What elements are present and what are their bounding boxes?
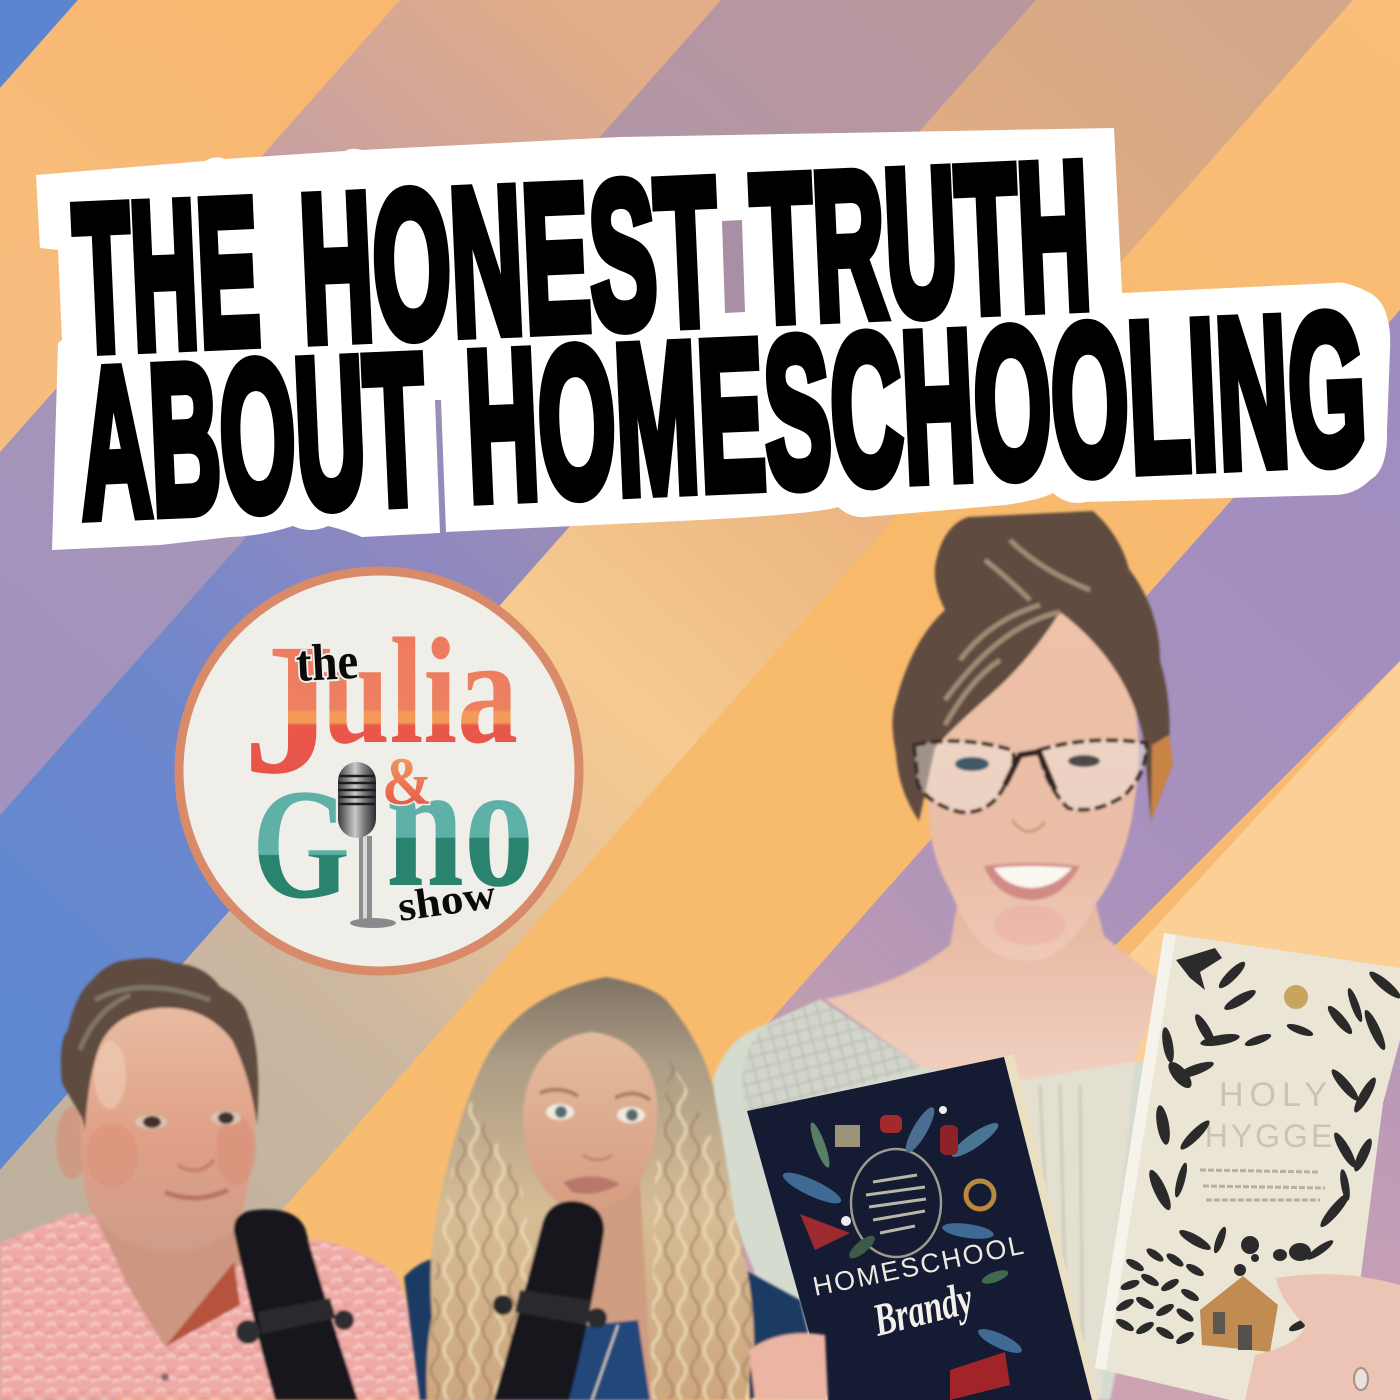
background hole between words [722,220,745,313]
logo letters: ulia: ulia [322,607,518,775]
denim top [550,1320,650,1400]
bird [1176,948,1222,990]
title line 1 [70,120,1095,396]
brows [540,1090,650,1100]
eyes [135,1115,167,1129]
face [80,1003,255,1252]
sweater knit shoulder [742,999,923,1110]
cover circle emblem [851,1149,941,1257]
title line 1: THE [70,156,264,396]
smile [984,863,1080,900]
navy shirt [404,1257,470,1400]
title sticker [36,120,1390,562]
blouse front [1013,1062,1135,1400]
person: woman holding books [713,511,1180,1400]
title line 2 [75,269,1371,562]
house illustration [1200,1276,1278,1352]
neck and chest [825,880,1165,1080]
book title: HOLY [1219,1076,1333,1114]
neck [90,1205,244,1347]
shirt [0,1213,432,1400]
foliage wreath [1114,959,1400,1346]
nose [583,1155,612,1160]
mouth [563,1176,620,1194]
podcast microphone [234,1209,358,1400]
hair curl texture [427,1060,754,1400]
face [523,1032,657,1212]
cover title: HOMESCHOOL [810,1229,1030,1302]
hair and bun [892,511,1173,821]
logo letter: J: J [243,604,335,813]
open collar [165,1262,240,1347]
glasses [914,740,1146,812]
hand holding book [1245,1274,1400,1400]
title line 2: ABOUT [75,310,430,562]
logo word: the: the [295,633,360,693]
necklace [592,1325,618,1400]
glasses bridge [1005,752,1055,790]
podcast microphone [493,1201,607,1400]
white sticker backing [36,128,1390,550]
button [1284,985,1308,1009]
logo ampersand: & [382,743,432,819]
raised hand [749,1333,828,1400]
person: man in pink shirt [0,958,432,1400]
ring [1354,1368,1368,1390]
neck [560,1180,652,1400]
title line 1: HONEST [296,136,722,386]
cover decorations [780,1104,1025,1400]
book: white Holy Hygge [1095,933,1400,1400]
hair back [427,977,754,1400]
mouth [165,1190,228,1198]
logo word: G: G [252,757,350,932]
shirt buttons [161,1373,169,1381]
logo word: show: show [395,872,499,931]
book: dark Homeschool [747,1054,1098,1400]
book subtitle: HYGGE [1205,1118,1335,1154]
logo word: no: no [386,725,534,924]
nose [1012,820,1045,832]
hair [61,958,258,1130]
ear [56,1107,88,1179]
eyes [546,1104,574,1120]
face [928,609,1139,961]
logo microphone [338,762,396,928]
cover script name: Brandy [867,1272,978,1346]
eyes [955,757,989,771]
logo: The Julia and Gino Show badge [179,571,579,971]
nose [178,1160,214,1170]
person: woman with curly blond hair [404,977,828,1400]
sweater [713,999,1180,1400]
